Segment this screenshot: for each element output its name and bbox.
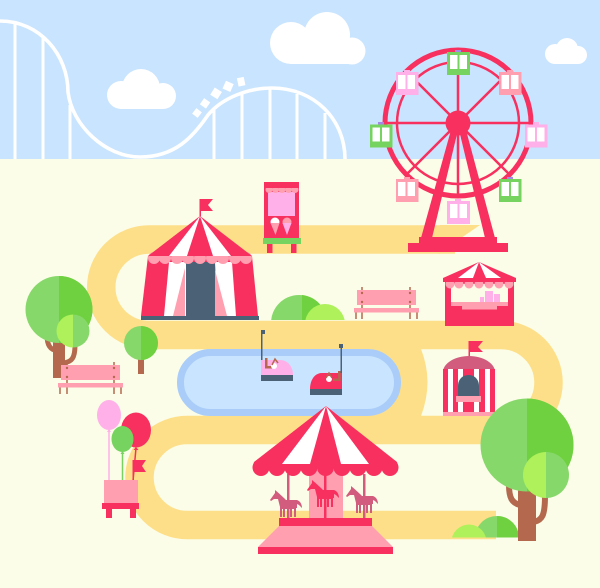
tree: left (26, 276, 92, 378)
cloud: centre (107, 69, 176, 109)
cabin: top green (447, 50, 470, 75)
bumper car: red (310, 344, 343, 395)
bench: right (354, 287, 419, 319)
cloud: right (545, 38, 587, 64)
booth header (264, 182, 299, 188)
cabin: bottom (447, 199, 470, 224)
stall window (451, 284, 508, 302)
booth flag (468, 341, 483, 357)
cart table (102, 503, 139, 518)
tent scallops (148, 252, 252, 264)
stall counter (451, 302, 508, 310)
yellow path (101, 225, 548, 525)
stall goods (480, 291, 500, 302)
cabin: lower right (499, 177, 522, 202)
tree: small (124, 326, 158, 374)
pool (180, 352, 398, 412)
cabin: top right (499, 70, 522, 95)
carousel roof (252, 406, 398, 476)
balloon strings (109, 430, 136, 481)
bench: left (58, 362, 123, 394)
legs and base (408, 110, 508, 252)
ice cream booth (263, 182, 301, 253)
tent entrance (141, 262, 259, 320)
cabin: left green (370, 122, 392, 148)
carousel poles (287, 474, 366, 519)
booth window (268, 192, 295, 216)
stall roof (443, 262, 516, 282)
carousel central column (309, 470, 343, 518)
roller coaster (0, 21, 345, 159)
balloon: pink (97, 400, 121, 432)
cart flag (132, 460, 146, 480)
cabin: top left (396, 70, 418, 95)
cloud: large (270, 12, 366, 64)
circus tent (141, 199, 259, 320)
tent body (141, 256, 258, 316)
tree: large right (480, 398, 574, 541)
booth window (458, 375, 479, 397)
balloon cart (97, 400, 151, 518)
sky (0, 0, 600, 159)
ice cream cones (270, 218, 292, 235)
bumper car: pink (261, 330, 293, 381)
booth dome (443, 356, 495, 371)
cart box (104, 480, 138, 503)
bushes: centre (271, 295, 345, 320)
booth counter and legs (263, 238, 301, 253)
booth counter (443, 396, 495, 416)
tent roof (148, 216, 252, 256)
horse: centre (307, 480, 339, 507)
stall scallops (446, 280, 514, 288)
cabin: right (525, 122, 548, 148)
ticket booth (443, 341, 495, 416)
food stall (443, 262, 516, 326)
bushes: lower right (452, 516, 518, 538)
tent flag (200, 199, 213, 217)
cabin: lower left (396, 177, 418, 202)
booth stripes (448, 369, 490, 412)
carousel platform (258, 518, 393, 554)
booth scallops (266, 186, 298, 193)
wheel rings and spokes (385, 50, 531, 196)
balloon: green (112, 426, 134, 454)
booth body (443, 369, 495, 412)
horse: right (346, 486, 378, 513)
ferris wheel (370, 50, 548, 252)
carousel (252, 406, 398, 554)
horse: left (270, 490, 302, 517)
ground (0, 159, 600, 588)
balloon: red (121, 412, 151, 450)
